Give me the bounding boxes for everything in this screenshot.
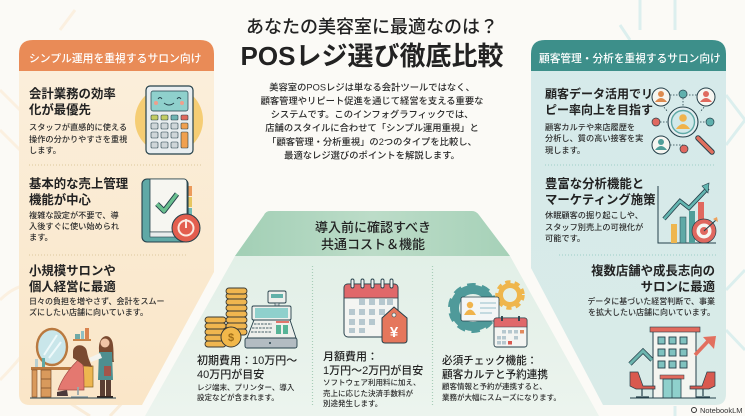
section: small salons: 小規模サロンや [29,263,116,278]
intro text: 美容室のPOSレジは単なる会計ツールではなく、 [269,82,475,92]
section: analytics and marketing: マーケティング施策 [545,192,656,207]
section: customer data: 顧客データ活用でリ [545,86,653,101]
column: initial cost: 40万円が目安 [197,367,264,381]
title: POSレジ選び徹底比較 [241,41,503,71]
panel header: simple operation: シンプル運用を重視するサロン向け [29,51,201,65]
section: basic sales management: 複雑な設定が不要で、導 [29,210,119,220]
section: small salons [29,263,164,317]
column: monthly cost: 売上に応じた決済手数料が [323,388,413,398]
intro text: システムです。このインフォグラフィックでは、 [271,108,473,120]
section: small salons: 個人経営に最適 [29,279,116,294]
panel header: simple operation [19,40,214,71]
panel: common costs and functions [145,211,599,416]
panel: simple operation salons [19,40,214,405]
section: accounting efficiency: 操作の分かりやすさを重視 [29,134,127,144]
intro text: 店舗のスタイルに合わせて「シンプル運用重視」と [265,122,479,133]
column: monthly cost: ソフトウェア利用料に加え、 [323,377,420,387]
section: analytics and marketing: 可能です。 [545,233,585,243]
section: analytics and marketing: 休眠顧客の掘り起こしや、 [545,210,643,220]
icon: gears, customer card, calendar [451,282,527,347]
column: initial cost: レジ端末、プリンター、導入 [197,382,295,392]
section: multi-store growth: を拡大したい店舗に向いています。 [588,307,715,317]
panel header: customer management [531,40,726,71]
icon: calendar with yen tag: ¥ [390,324,399,341]
panel: customer management salons [531,40,726,405]
center heading: 導入前に確認すべき [315,220,431,235]
section: accounting efficiency: スタッフが直感的に使える [29,122,127,132]
section: customer data: 現します。 [545,146,585,155]
column: initial cost: 初期費用：10万円〜 [197,353,297,367]
title [241,17,503,71]
section: multi-store growth: データに基づいた経営判断で、事業 [587,296,715,306]
section: accounting efficiency [29,86,127,155]
section: basic sales management: 基本的な売上管理 [29,176,129,191]
icon: salon building [630,327,716,398]
column: monthly cost [323,349,423,408]
section: customer data: 分析し、質の高い接客を実 [545,133,643,143]
column: monthly cost: 1万円〜2万円が目安 [323,363,423,377]
section: analytics and marketing: スタッフ別売上の可視化が [545,222,643,232]
section: analytics and marketing [545,176,656,243]
icon: calculator [135,86,203,154]
icon: growth chart with target [658,183,718,243]
section: customer data: ピー率向上を目指す [545,102,653,117]
icon: salon scene [30,328,116,398]
section: customer data: 顧客カルテや来店履歴を [545,122,635,132]
icon: calendar with yen tag [344,279,407,343]
column: required functions [442,354,561,402]
column: initial cost [197,353,297,402]
section: basic sales management: 機能が中心 [29,192,92,207]
column: initial cost: 設定などが含まれます。 [197,392,279,402]
column: required functions: 必須チェック機能： [442,354,537,367]
section: multi-store growth: サロンに最適 [641,279,716,294]
section: accounting efficiency: 会計業務の効率 [29,86,116,101]
column: required functions: 顧客カルテと予約連携 [442,368,548,381]
section: small salons: ズにしたい店舗に向いています。 [29,307,148,317]
section: customer data [545,86,653,155]
column: monthly cost: 月額費用： [323,349,378,363]
icon: coins and cash register [205,288,297,348]
NotebookLM watermark: NotebookLM [700,406,743,415]
section: accounting efficiency: します。 [29,146,61,155]
section: multi-store growth: 複数店舗や成長志向の [591,263,715,278]
intro text: 最適なレジ選びのポイントを解説します。 [284,150,460,160]
icon: customer network magnifier [652,88,715,154]
column: required functions: 業務が大幅にスムーズになります。 [442,392,561,402]
section: small salons: 日々の負担を増やさず、会計をスムー [29,296,164,306]
column: monthly cost: 別途発生します。 [323,398,382,408]
section: basic sales management: 入後すぐに使い始められ [29,221,119,231]
intro text: 「顧客管理・分析重視」の2つのタイプを比較し、 [267,136,477,147]
section: basic sales management: ます。 [29,233,53,242]
column: required functions: 顧客情報と予約が連携すると、 [442,381,547,391]
panel header: customer management: 顧客管理・分析を重視するサロン向け [539,52,721,65]
section: basic sales management [29,176,129,242]
icon: notebook with power button [142,179,200,242]
intro text: 顧客管理やリピート促進を通じて経営を支える重要な [261,95,483,106]
center heading: 共通コスト＆機能 [321,237,425,252]
section: multi-store growth [587,263,716,317]
section: accounting efficiency: 化が最優先 [29,102,91,117]
icon: coins and cash register: $ [228,332,234,344]
intro text [261,82,483,160]
section: analytics and marketing: 豊富な分析機能と [545,176,644,191]
center heading [235,211,510,256]
title: あなたの美容室に最適なのは？ [246,17,498,37]
